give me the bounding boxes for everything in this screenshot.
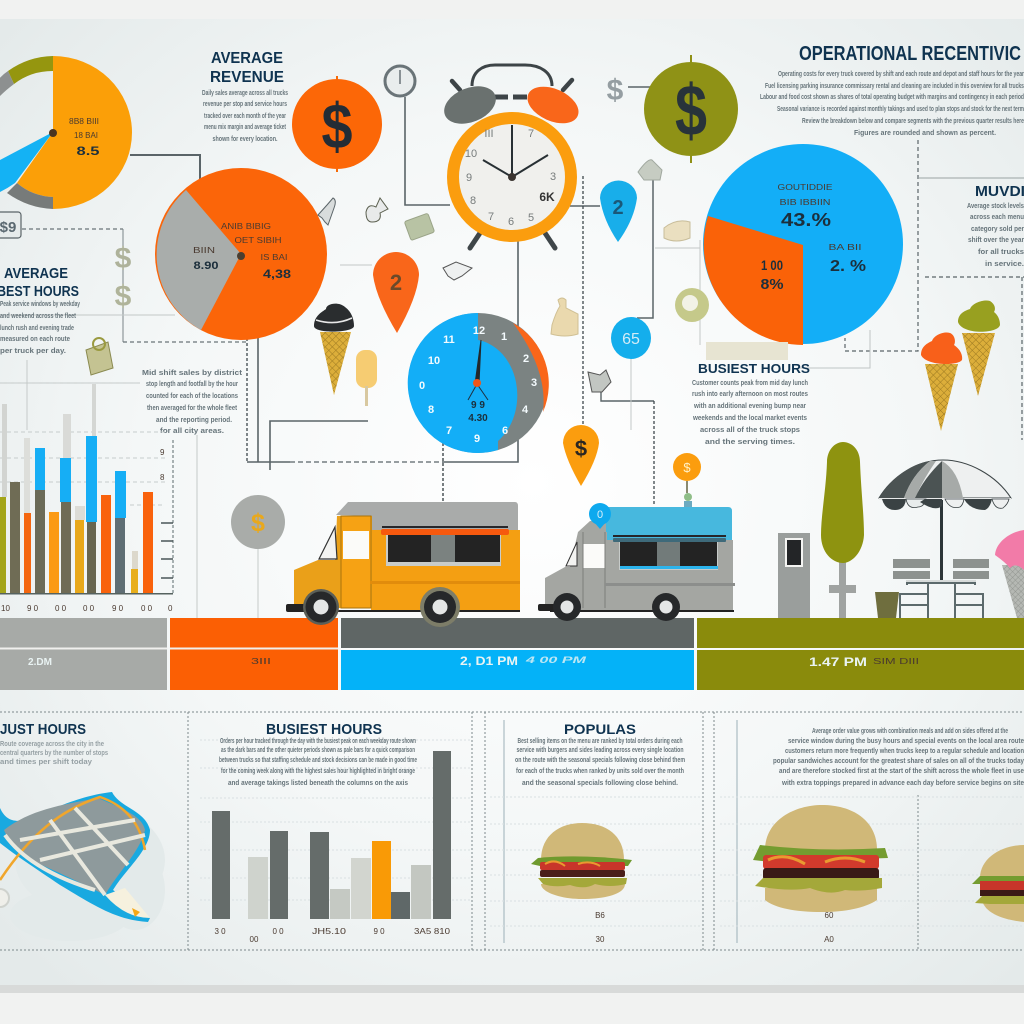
panel: popular items: on the route with the seasonal specials following close behind them: [515, 755, 685, 764]
text: middle left note: for all city areas.: [160, 426, 224, 435]
text: middle left note: counted for each of the locations: [146, 391, 238, 400]
panel: busiest hours map: [0, 721, 165, 941]
icon: burger cropped: [972, 845, 1024, 922]
bar chart: left grouped bars: 0 0: [55, 604, 67, 613]
icon: alarm clock: 6: [508, 216, 514, 228]
strip: dark and blue segment: [341, 618, 694, 690]
timeline strip: [0, 618, 1024, 690]
icon: small blue pin on truck: [589, 503, 611, 529]
text: middle left note: and the reporting period.: [156, 415, 232, 424]
icon: burger large: [753, 805, 888, 912]
text: busiest hours middle body: with an additional evening bump near: [693, 401, 806, 410]
icon: blue wall clock: 3: [531, 377, 537, 389]
icon: orange dollar pin: [563, 425, 599, 486]
pie chart: right blue and orange: BIB IBBIIN: [780, 198, 831, 207]
pie chart: right blue and orange: 43.%: [781, 210, 831, 230]
strip: orange segment: 3III: [251, 657, 271, 666]
icon: alarm clock: III: [484, 128, 494, 140]
icon: burger small: [531, 823, 632, 899]
text: best hours body: per truck per day.: [0, 346, 66, 355]
icon: alarm clock: 8: [470, 195, 476, 207]
bars: 3A5 810: [414, 927, 451, 936]
icon: small blue pin on truck: 0: [597, 509, 603, 521]
street scene: [778, 442, 1024, 618]
panel: burgers right: A0: [824, 935, 834, 944]
bar chart: left grouped bars: 9: [160, 448, 165, 457]
pie chart: centre orange and grey: BIIN: [193, 246, 215, 255]
text: mundi body: [967, 201, 1024, 268]
heading: average revenue: REVENUE: [210, 69, 284, 86]
pie chart: centre orange and grey: [155, 168, 327, 340]
icon: blue wall clock: 0: [419, 380, 425, 392]
text: average revenue body: [202, 88, 288, 143]
panel: popular items: [515, 721, 685, 944]
text: busiest hours body: for the coming week along with the highest sales hour highlighted in bright orange: [221, 766, 415, 775]
bar chart: left grouped bars: 9 0: [27, 604, 39, 613]
icon: blue wall clock: 4: [522, 404, 529, 416]
heading: operational: [760, 43, 1024, 137]
panel: busiest hours map: Route coverage across the city in the: [0, 739, 104, 748]
pink ice cream: [995, 530, 1024, 618]
icon: orange dollar coin: [292, 76, 382, 172]
icon: orange dollar coin: $: [322, 90, 352, 162]
text: average revenue body: shown for every location.: [212, 134, 278, 143]
icon: small wall clock: [385, 66, 415, 96]
umbrella and table: [879, 460, 1011, 618]
text: mundi body: for all trucks: [978, 247, 1024, 256]
strip: grey segment: [0, 618, 167, 690]
bars: 0 0: [272, 927, 284, 936]
strip: dark and blue segment: 2, D1 PM: [460, 654, 518, 668]
bar chart: left grouped bars: 0 0: [83, 604, 95, 613]
text: average revenue body: menu mix margin and average ticket: [204, 122, 286, 131]
icon: olive dollar coin: [644, 55, 738, 163]
text: busiest hours middle body: across all of the truck stops: [700, 425, 800, 434]
text: operational body: [760, 69, 1024, 137]
panel: popular items: B6: [595, 911, 605, 920]
text: busiest hours middle body: weekends and the local market events: [692, 413, 807, 422]
icon: grey dollar circle: [231, 495, 285, 549]
bars: JH5.10: [312, 927, 347, 936]
icon: alarm clock: 9: [466, 172, 472, 184]
icon: alarm clock: 7: [488, 211, 494, 223]
kiosk: [778, 533, 810, 618]
pie chart: top left orange: [0, 56, 132, 209]
bar chart: left grouped bars: 8: [160, 473, 165, 482]
icon: popsicle: [356, 350, 377, 406]
panel: popular items: 30: [596, 935, 605, 944]
icon: blue wall clock: 11: [443, 334, 455, 346]
heading: average revenue: AVERAGE: [211, 50, 283, 67]
bars: 3 0: [214, 927, 226, 936]
map illustration: [0, 792, 165, 941]
connector lines: [0, 87, 1024, 660]
icon: blue wall clock: 10: [428, 355, 440, 367]
text: average revenue body: Daily sales average across all trucks: [202, 88, 288, 97]
bar chart: left grouped bars: [0, 383, 173, 613]
text: busiest hours body: and average takings listed beneath the columns on the axis: [228, 778, 408, 787]
heading: average best hours: [0, 265, 81, 355]
pie chart: centre orange and grey: 4,38: [263, 267, 291, 281]
text: middle left note: Mid shift sales by district: [142, 368, 243, 377]
icon: alarm clock: 5: [528, 212, 534, 224]
panel: popular items: service with burgers and sides leading across every single location: [516, 745, 684, 754]
tree: [821, 442, 864, 618]
text: middle left note: [142, 368, 243, 435]
icon: grey dollar circle: $: [251, 509, 265, 537]
icon: orange dollar pin: $: [575, 436, 587, 461]
icon: alarm clock: 10: [465, 148, 477, 160]
icon: small dollar notes: $: [115, 242, 132, 275]
panel: busiest hours bar chart: [212, 721, 451, 944]
bar chart: left grouped bars: 0: [168, 604, 173, 613]
icon: blue wall clock: 6: [502, 425, 508, 437]
bars: 9 0: [373, 927, 385, 936]
icon: olive dollar coin: $: [675, 71, 707, 151]
strip: olive segment: 1.47 PM: [809, 655, 867, 669]
text: best hours body: [0, 299, 81, 355]
text: busiest hours middle body: [692, 378, 808, 446]
icon: blue 65 pin: 65: [622, 331, 640, 348]
icon: green ice cream: [958, 300, 1000, 396]
strip: dark and blue segment: 4 00 PM: [524, 655, 587, 665]
heading: mundi: [967, 183, 1024, 268]
pie chart: top left orange: 8.5: [76, 144, 100, 158]
text: busiest hours middle body: and the serving times.: [705, 437, 795, 446]
heading: average best hours: AVERAGE: [4, 265, 68, 282]
icon: blue wall clock: 9: [474, 433, 480, 445]
icon: orange ice cream: [921, 332, 962, 431]
pie chart: centre orange and grey: ANIB BIBIG: [221, 222, 271, 231]
icon: alarm clock: 7: [528, 128, 534, 140]
plant pot: [875, 592, 899, 618]
heading: mundi: MUVDI: [975, 183, 1024, 200]
text: best hours body: and weekend across the fleet: [0, 311, 76, 320]
pie chart: top left orange: 18 BAI: [74, 131, 98, 140]
text: best hours body: lunch rush and evening trade: [0, 323, 74, 332]
text: best hours body: Peak service windows by weekday: [0, 299, 81, 308]
bars: [212, 751, 451, 944]
icon: alarm clock: [439, 65, 584, 248]
text: busiest hours middle body: rush into early afternoon on most routes: [692, 389, 808, 398]
text: best hours body: measured on each route: [0, 334, 70, 343]
text: middle left note: stop length and footfall by the hour: [146, 379, 238, 388]
text: busiest hours body: between trucks so that staffing schedule and stock decisions can be made in good time: [219, 755, 417, 764]
panel: burgers right: [753, 726, 1024, 944]
bar chart: left grouped bars: 9 0: [112, 604, 124, 613]
text: busiest hours body: [219, 736, 417, 787]
text: average revenue body: tracked over each month of the year: [204, 111, 286, 120]
bottom panels: [0, 712, 1024, 950]
icon: blue pin: 2: [612, 197, 624, 219]
text: busiest hours body: as the dark bars and the other quieter periods shown as pale bars for a quick comparison: [221, 745, 415, 754]
text: operational body: Figures are rounded and shown as percent.: [854, 128, 996, 137]
icon: blue wall clock: 7: [446, 425, 452, 437]
pie chart: right blue and orange: 8%: [760, 276, 784, 293]
heading: busiest hours middle: BUSIEST HOURS: [698, 361, 810, 376]
strip: olive segment: SIM DIII: [873, 657, 919, 666]
icon: blue pin: [600, 181, 637, 242]
icon: blue wall clock: [408, 313, 549, 453]
small doodle icons: $: [607, 74, 624, 107]
strip: grey segment: 2.DM: [28, 657, 52, 668]
icon: blue wall clock: 9 9: [471, 400, 485, 411]
food truck: grey and blue: [538, 507, 735, 621]
bar chart: left grouped bars: 10: [1, 604, 10, 613]
text: busiest hours body: Orders per hour tracked through the day with the busiest peak on each weekday route shown: [220, 736, 416, 745]
panel: busiest hours bar chart: BUSIEST HOURS: [266, 721, 382, 738]
icon: alarm clock: 6K: [539, 190, 555, 204]
panel: busiest hours map: JUST HOURS: [0, 721, 86, 738]
icon: small dollar notes: [0, 212, 132, 313]
icon: ice cream cone black: [314, 304, 354, 395]
pie chart: top left orange: 8B8 BIII: [69, 117, 99, 126]
pie chart: right blue and orange: 2. %: [830, 258, 866, 275]
pie chart: centre orange and grey: OET SIBIH: [234, 236, 282, 245]
heading: busiest hours middle: [692, 342, 810, 446]
food truck: orange: [286, 502, 520, 627]
icon: map pin orange: 2: [390, 270, 402, 295]
panel: busiest hours map: and times per shift today: [0, 757, 93, 766]
icon: alarm clock: 3: [550, 171, 556, 183]
pie chart: centre orange and grey: 8.90: [194, 260, 218, 272]
icon: map pin orange: [373, 252, 419, 333]
icon: small dollar notes: $9: [0, 219, 16, 236]
text: average revenue body: revenue per stop and service hours: [203, 99, 287, 108]
text: mundi body: in service.: [985, 259, 1024, 268]
icon: blue wall clock: 2: [523, 353, 529, 365]
icon: blue wall clock: 12: [473, 325, 485, 337]
strip: olive segment: [697, 618, 1024, 690]
panel: burgers right: 60: [825, 911, 834, 920]
pie chart: centre orange and grey: IS BAI: [260, 253, 288, 262]
icon: small orange pin: [673, 453, 701, 511]
icon: blue 65 pin: [611, 317, 651, 359]
icon: small orange pin: $: [683, 460, 691, 475]
pie chart: right blue and orange: [703, 144, 903, 345]
panel: popular items: and the seasonal specials following close behind.: [522, 778, 678, 787]
small doodle icons: [318, 74, 709, 392]
strip: orange segment: [170, 618, 338, 690]
pie chart: right blue and orange: BA BII: [828, 243, 862, 252]
text: busiest hours middle body: Customer counts peak from mid day lunch: [692, 378, 808, 387]
panel: popular items: Best selling items on the menu are ranked by total orders during each: [518, 736, 683, 745]
panel: popular items: POPULAS: [564, 721, 636, 737]
icon: blue wall clock: 8: [428, 404, 434, 416]
panel: popular items: for each of the trucks when ranked by units sold over the month: [516, 766, 684, 775]
panel: busiest hours map: central quarters by the number of stops: [0, 748, 108, 757]
bar chart: left grouped bars: 0 0: [141, 604, 153, 613]
text: middle left note: then averaged for the whole fleet: [147, 403, 237, 412]
pie chart: right blue and orange: 1 00: [761, 257, 783, 273]
icon: small bag: [86, 338, 113, 375]
icon: blue wall clock: 4.30: [468, 413, 488, 424]
icon: small dollar notes: $: [115, 280, 132, 313]
icon: blue wall clock: 1: [501, 331, 507, 343]
heading: average revenue: [202, 50, 288, 143]
pie chart: right blue and orange: GOUTIDDIE: [778, 183, 832, 192]
bars: 00: [250, 935, 259, 944]
